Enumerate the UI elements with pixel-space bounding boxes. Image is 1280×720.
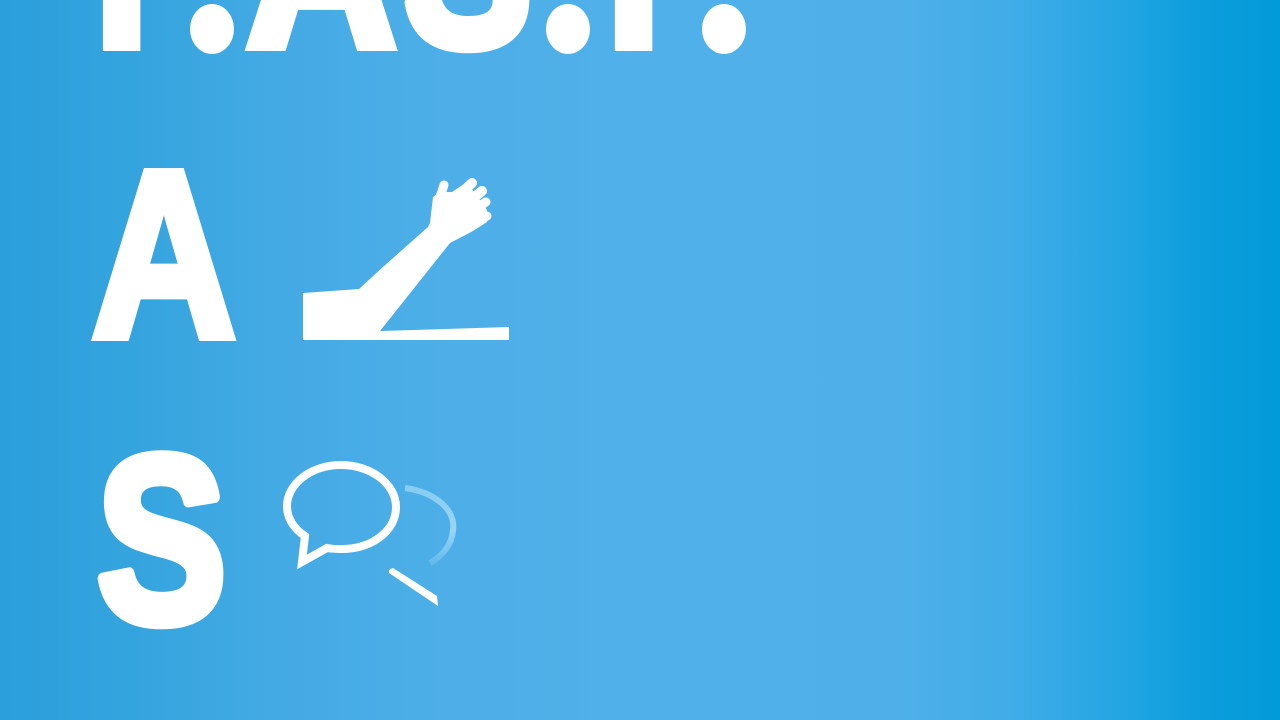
icon: raised arm with hand — [303, 182, 509, 340]
icon: speech bubble with broken second bubble — [287, 465, 453, 606]
letter A: Arm: A — [92, 123, 236, 387]
title: F.A.S.T. (cropped at top) — [102, 0, 746, 54]
letter S: Speech: S — [97, 408, 226, 671]
